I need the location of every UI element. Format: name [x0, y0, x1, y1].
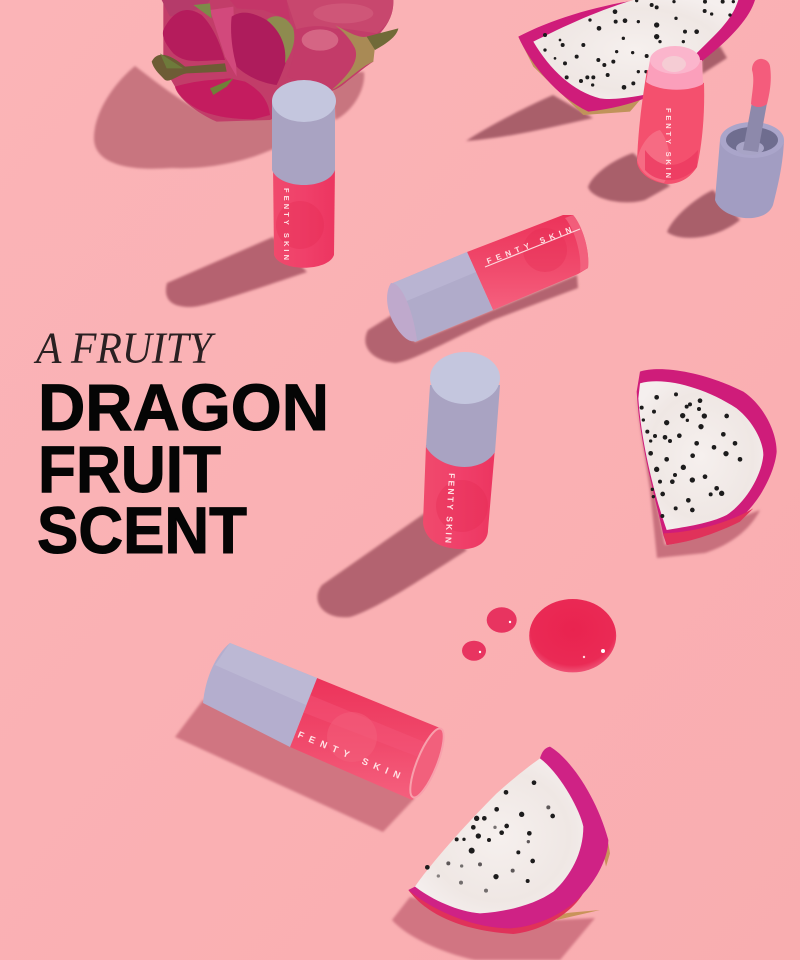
label: FENTY SKIN [664, 108, 673, 178]
label: FENTY SKIN [443, 473, 457, 543]
whole dragon fruit [152, 0, 398, 122]
bottle 3 [423, 352, 500, 549]
label: FENTY SKIN [296, 730, 402, 782]
heading: DRAGON FRUIT SCENT [37, 370, 329, 567]
open cap with wand [715, 59, 784, 218]
seeds [543, 0, 735, 90]
label: FENTY SKIN [485, 225, 573, 266]
bottle 1 [272, 80, 336, 268]
seeds [640, 392, 742, 518]
seeds [425, 780, 555, 893]
bottle 4 [203, 643, 450, 801]
fruit slice: top [518, 0, 755, 115]
heading: DRAGON FRUIT SCENT: SCENT [37, 493, 247, 567]
fruit slice: right [637, 369, 777, 545]
open bottle: top right [637, 46, 704, 184]
heading: DRAGON FRUIT SCENT: FRUIT [38, 432, 221, 506]
shadows [94, 46, 760, 960]
heading: A FRUITY: A FRUITY [33, 324, 216, 372]
droplets [462, 599, 616, 672]
fruit slice: bottom [408, 747, 610, 934]
heading: DRAGON FRUIT SCENT: DRAGON [38, 370, 329, 444]
bottle 2 [387, 215, 588, 342]
label: FENTY SKIN [282, 188, 291, 260]
